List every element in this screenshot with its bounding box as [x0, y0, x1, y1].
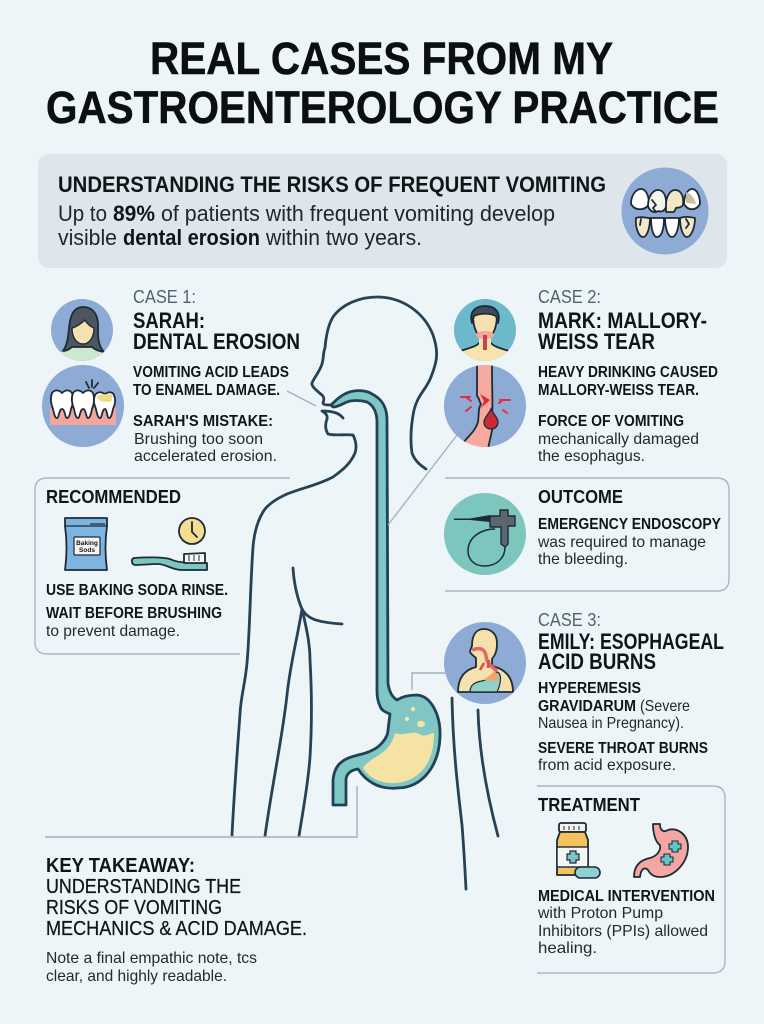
key takeaway note: Note a final empathic note, tcs [46, 950, 257, 967]
banner statistic text [58, 201, 555, 250]
key takeaway heading: UNDERSTANDING THE [46, 876, 241, 898]
treatment text: Inhibitors (PPIs) allowed [538, 923, 708, 940]
icon: esophageal tear [444, 364, 526, 450]
treatment text: healing. [538, 940, 597, 957]
case 2 label: CASE 2: [538, 287, 601, 307]
recommended text: to prevent damage. [46, 623, 180, 640]
icon: baking soda bag: Sods [79, 547, 95, 554]
case 2 finding: MALLORY-WEISS TEAR. [538, 382, 699, 399]
icon: Mark avatar [454, 299, 516, 365]
title [46, 33, 719, 133]
panel: case 2 Mark [444, 287, 718, 465]
icon: healing stomach [634, 824, 688, 877]
case 3 heading: EMILY: ESOPHAGEAL [538, 629, 724, 654]
panel: treatment [537, 786, 725, 973]
title: REAL CASES FROM MY [150, 33, 613, 84]
case 2 finding [538, 364, 718, 399]
case 2 mechanism: FORCE OF VOMITING [538, 413, 684, 430]
case 1 finding: VOMITING ACID LEADS [133, 364, 289, 381]
treatment heading: TREATMENT [538, 795, 640, 815]
banner statistic text: of patients with frequent vomiting develop [161, 201, 555, 226]
case 1 mistake [133, 413, 277, 465]
case 3 diagnosis: HYPEREMESIS [538, 680, 641, 697]
treatment text: with Proton Pump [537, 905, 663, 922]
key takeaway heading: RISKS OF VOMITING [46, 897, 222, 919]
acid bubbles [405, 707, 425, 727]
recommended text [46, 582, 228, 640]
case 3 heading: ACID BURNS [538, 649, 656, 674]
icon: baking soda bag [65, 518, 107, 570]
case 2 heading [538, 308, 707, 354]
panel: case 3 Emily [444, 610, 724, 774]
case 1 mistake: accelerated erosion. [134, 448, 277, 465]
leader lines [45, 391, 457, 837]
key takeaway note: clear, and highly readable. [46, 968, 227, 985]
icon: eroded molars [42, 365, 124, 447]
case 3 diagnosis: Nausea in Pregnancy). [538, 715, 684, 732]
case 3 diagnosis [538, 680, 690, 732]
icon: acid burn torso [444, 622, 526, 704]
case 1 mistake: SARAH'S MISTAKE: [133, 413, 273, 430]
outcome text [537, 516, 721, 568]
icon: baking soda bag: Baking [76, 540, 98, 547]
outcome heading: OUTCOME [538, 487, 623, 507]
icon: eroded teeth [622, 168, 708, 254]
treatment text: MEDICAL INTERVENTION [538, 888, 715, 905]
key takeaway heading: MECHANICS & ACID DAMAGE. [46, 918, 307, 940]
recommended text: USE BAKING SODA RINSE. [46, 582, 228, 599]
case 2 finding: HEAVY DRINKING CAUSED [538, 364, 718, 381]
stomach acid [363, 733, 434, 783]
key takeaway note [46, 950, 257, 985]
treatment text [537, 888, 715, 957]
icon: Sarah avatar [51, 299, 113, 361]
key takeaway heading [46, 855, 307, 940]
case 1 label: CASE 1: [133, 287, 196, 307]
banner statistic text: 89% [113, 201, 155, 226]
icon: medicine bottle and capsule [557, 823, 600, 878]
case 3 diagnosis: (Severe [640, 698, 690, 715]
banner heading: UNDERSTANDING THE RISKS OF FREQUENT VOMITING [58, 172, 606, 197]
case 3 heading [538, 629, 724, 674]
esophagus and stomach [331, 391, 440, 805]
banner statistic text: within two years. [265, 225, 422, 250]
case 1 mistake: Brushing too soon [134, 431, 263, 448]
case 2 mechanism: the esophagus. [538, 448, 645, 465]
case 1 heading: DENTAL EROSION [133, 329, 300, 354]
case 2 mechanism: mechanically damaged [538, 431, 699, 448]
case 1 heading: SARAH: [133, 308, 205, 333]
outcome text: was required to manage [537, 534, 706, 551]
case 2 heading: MARK: MALLORY- [538, 308, 707, 333]
icon: clock and toothbrush [132, 518, 207, 570]
banner statistic text: visible [58, 225, 117, 250]
outcome text: EMERGENCY ENDOSCOPY [538, 516, 721, 533]
case 1 finding: TO ENAMEL DAMAGE. [133, 382, 280, 399]
panel: case 1 Sarah [42, 287, 300, 465]
banner statistic text: dental erosion [123, 225, 260, 250]
panel: key takeaway [46, 855, 307, 985]
body illustration [232, 297, 498, 889]
case 2 mechanism [538, 413, 699, 465]
body outline [232, 297, 498, 889]
key takeaway heading: KEY TAKEAWAY: [46, 855, 195, 877]
recommended text: WAIT BEFORE BRUSHING [46, 605, 222, 622]
recommended heading: RECOMMENDED [46, 487, 181, 507]
case 3 injury: from acid exposure. [538, 757, 676, 774]
case 1 heading [133, 308, 300, 354]
case 3 injury: SEVERE THROAT BURNS [538, 740, 708, 757]
panel: recommended [35, 478, 290, 654]
case 1 finding [133, 364, 289, 399]
case 3 diagnosis: GRAVIDARUM [538, 698, 636, 715]
outcome text: the bleeding. [538, 551, 628, 568]
case 3 injury [538, 740, 708, 774]
icon: endoscope [444, 493, 526, 575]
banner statistic text: Up to [58, 201, 107, 226]
case 3 label: CASE 3: [538, 610, 601, 630]
panel: outcome [444, 478, 729, 591]
panel: vomiting risk banner [38, 154, 727, 268]
case 2 heading: WEISS TEAR [538, 329, 655, 354]
